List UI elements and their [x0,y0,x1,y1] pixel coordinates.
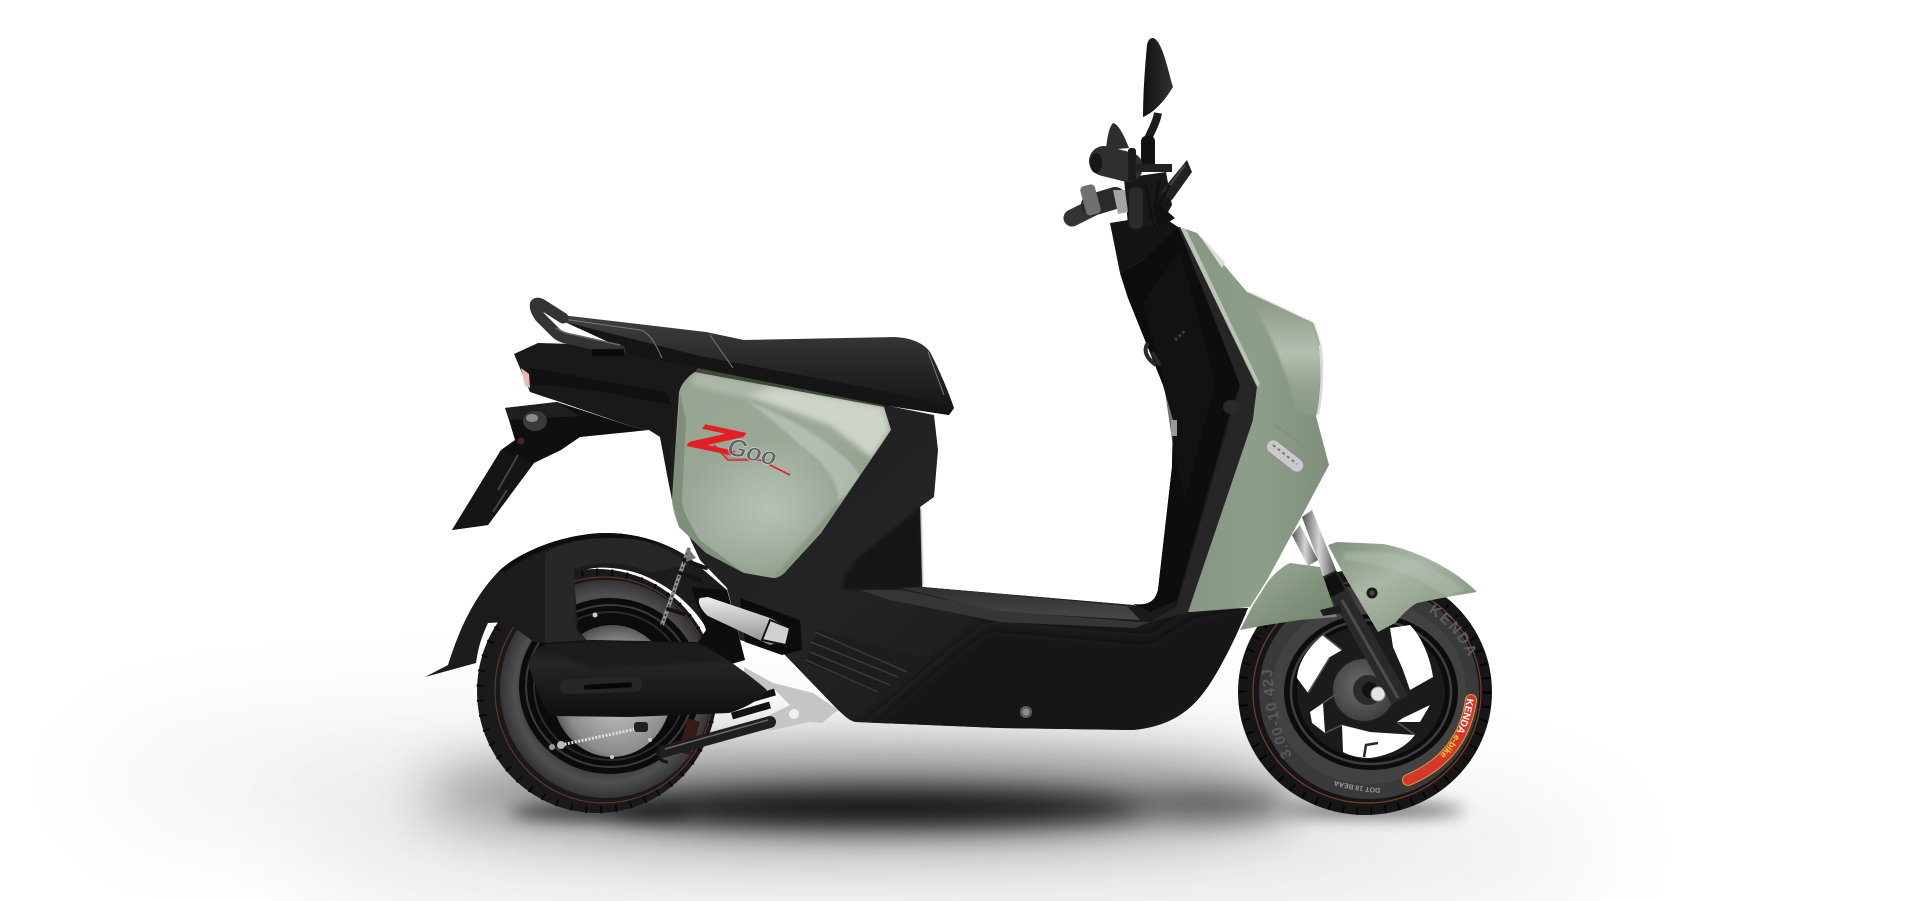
front fork behind fender [1292,525,1318,566]
valve stem [1364,743,1378,757]
brake cables [1145,180,1170,232]
floor mat [922,587,1133,610]
front hub [1331,657,1397,723]
ZGoo logo: Z [686,415,747,464]
belt cover [528,640,767,717]
turn signal [518,411,547,444]
kick stand [658,692,799,762]
lower grip [1072,208,1092,218]
headlight lens edge [1318,345,1322,414]
front fork [1302,510,1408,705]
chrome stem [1113,190,1128,214]
handlebar assembly [1072,38,1239,436]
glovebox vent [1175,330,1186,340]
front fender [1240,542,1477,632]
daytime light [1263,425,1315,490]
front tyre [1238,569,1492,815]
brake rod [561,727,645,745]
tyre sidewall lettering [1428,612,1469,658]
headlight hood highlight [1247,292,1322,416]
KENDA e-bike sticker: KENDA e-bike [1440,698,1474,758]
front wheel [1238,571,1492,815]
seat stitching [563,319,944,395]
display [1160,160,1192,200]
ZGoo logo: Goo [725,433,780,472]
ground shadow [80,730,1610,900]
leg shield band [1150,227,1257,622]
steering column [1110,215,1178,273]
right mirror [1106,123,1129,150]
rear shock absorber [662,548,706,625]
fork clamp [1129,187,1143,229]
coat hook [1146,343,1160,365]
main body [671,227,1260,745]
floor screw [1020,706,1032,718]
rear wheel [477,569,717,813]
wheel openings [1297,625,1433,758]
grab handle [535,303,624,356]
tail light [521,368,530,388]
lower side shading [859,608,1248,730]
panel reflection [745,385,890,458]
rear tail body [514,343,700,500]
charge port [1223,400,1239,414]
rear rim [519,598,701,774]
front wheel: 3.00-10 42J [1262,670,1291,759]
swing arm bracket [691,587,745,668]
dark recess under side panel [842,507,922,590]
rear fender [425,533,745,677]
rear hub motor [552,625,672,757]
inner leg shield recess [1120,227,1240,612]
centre stand bracket [744,667,838,731]
handlebar cross tube [1135,164,1172,172]
seat [561,315,954,415]
ZGoo logo [686,415,790,475]
front rim [1284,614,1458,770]
footrest [699,597,802,655]
spoke highlights [1308,635,1415,735]
red rim sticker [678,718,700,755]
front wheel: KENDA [1429,604,1476,656]
front leg shield panel [1180,227,1329,612]
cover slot [560,677,642,694]
scooter product illustration [215,38,1538,901]
upper grip [1104,161,1128,167]
side rib panel [806,630,932,697]
headstock mass [1124,172,1172,226]
front wheel: DOT 18 BEAAMA [1334,780,1380,793]
side panel [672,368,891,580]
mirror stem [1145,113,1158,165]
left mirror [1143,38,1173,117]
KENDA e-bike sticker [1402,694,1477,786]
rear tyre [477,569,717,813]
rear mudguard and licence plate holder [452,402,649,530]
